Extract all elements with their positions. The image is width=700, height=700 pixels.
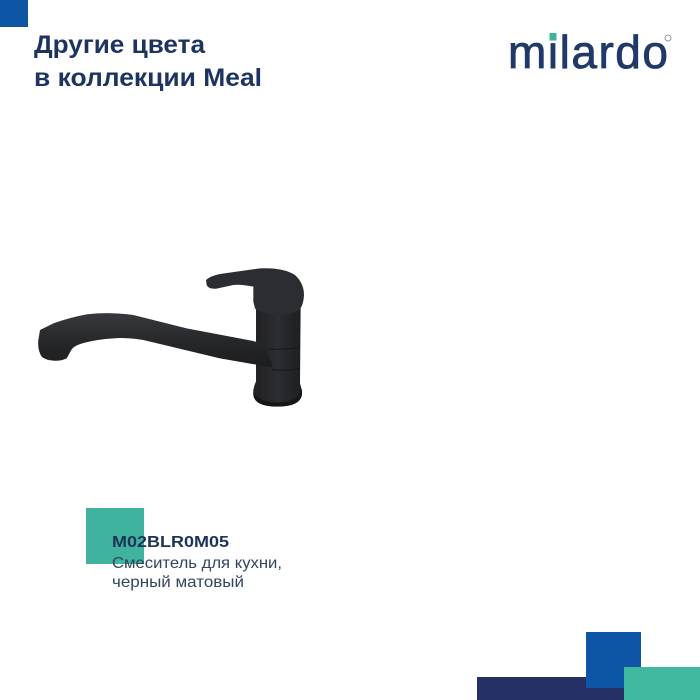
faucet body seams (269, 347, 300, 370)
title (34, 31, 262, 92)
faucet base ring (253, 388, 302, 407)
caption (112, 534, 282, 591)
product description: черный матовый (112, 574, 244, 591)
corner square: top left (0, 0, 28, 27)
title: в коллекции Meal (34, 64, 262, 92)
product code: M02BLR0M05 (112, 534, 229, 551)
faucet body (253, 303, 302, 406)
faucet spout (38, 313, 272, 367)
product description: Смеситель для кухни, (112, 555, 282, 572)
product photo: black matte kitchen faucet (38, 268, 304, 407)
logo: milardo: milardo (508, 26, 668, 78)
product description (112, 555, 282, 591)
faucet handle (206, 268, 304, 315)
title: Другие цвета (34, 31, 206, 59)
accent square behind caption (86, 508, 144, 564)
corner blocks: bottom right (477, 632, 700, 700)
